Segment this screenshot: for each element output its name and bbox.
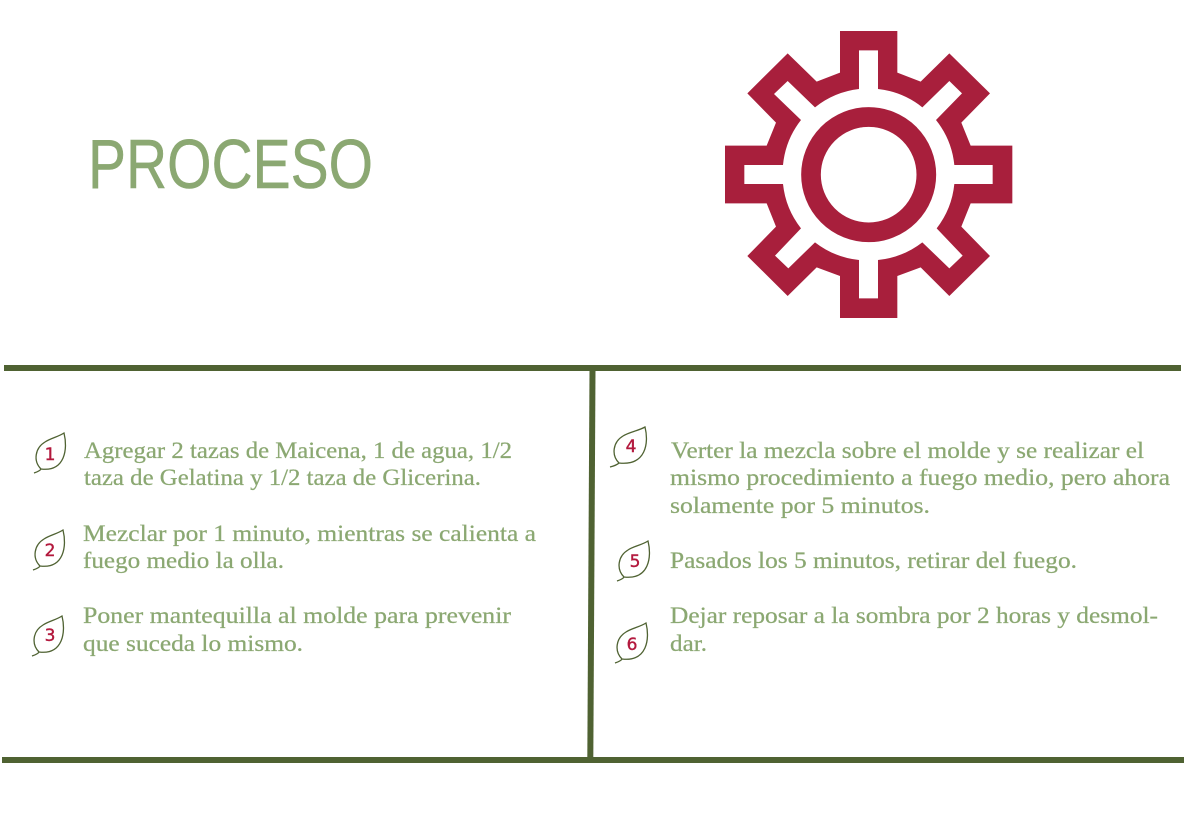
step 1 text	[84, 438, 512, 491]
icon: leaf 3	[32, 616, 63, 656]
step 3 text: que suceda lo mismo.	[83, 631, 303, 657]
step 4 text	[670, 438, 1171, 519]
icon: leaf 5	[617, 541, 649, 581]
step 6 text	[670, 603, 1158, 657]
step 2 text: fuego medio la olla.	[83, 548, 284, 574]
step 6	[615, 603, 1158, 663]
step 2	[33, 521, 537, 574]
panel: left steps	[32, 433, 537, 657]
step 3	[32, 603, 511, 657]
icon: leaf 4	[610, 427, 646, 467]
step 1	[34, 433, 512, 491]
step 4 text: Verter la mezcla sobre el molde y se realizar el	[671, 438, 1145, 464]
panel: right steps	[610, 427, 1171, 663]
icon: gear	[725, 31, 1012, 318]
step 2 text	[83, 521, 537, 574]
step 6 text: dar.	[670, 631, 707, 657]
step 4	[610, 427, 1171, 519]
bottom divider line	[2, 757, 1184, 763]
icon: leaf 3: 3	[45, 626, 55, 646]
icon: leaf 1: 1	[45, 445, 55, 465]
step 5	[617, 541, 1077, 581]
icon: leaf 5: 5	[630, 552, 640, 572]
icon: leaf 2: 2	[45, 541, 55, 561]
icon: leaf 6	[615, 623, 647, 663]
step 4 text: solamente por 5 minutos.	[670, 493, 930, 519]
icon: leaf 4: 4	[626, 437, 636, 457]
step 6 text: Dejar reposar a la sombra por 2 horas y desmol-	[670, 603, 1158, 629]
top divider line	[4, 365, 1181, 371]
title: PROCESO	[88, 125, 373, 203]
icon: leaf 2	[33, 530, 64, 570]
step 5 text: Pasados los 5 minutos, retirar del fuego.	[670, 548, 1077, 574]
step 3 text	[83, 603, 511, 657]
icon: leaf 1	[34, 433, 65, 473]
step 3 text: Poner mantequilla al molde para prevenir	[83, 603, 511, 629]
step 1 text: Agregar 2 tazas de Maicena, 1 de agua, 1/2	[84, 438, 512, 464]
step 4 text: mismo procedimiento a fuego medio, pero ahora	[670, 465, 1171, 491]
icon: leaf 6: 6	[627, 635, 637, 655]
step 2 text: Mezclar por 1 minuto, mientras se calienta a	[83, 521, 537, 547]
vertical divider line	[590, 370, 592, 760]
step 1 text: taza de Gelatina y 1/2 taza de Glicerina.	[84, 465, 481, 491]
